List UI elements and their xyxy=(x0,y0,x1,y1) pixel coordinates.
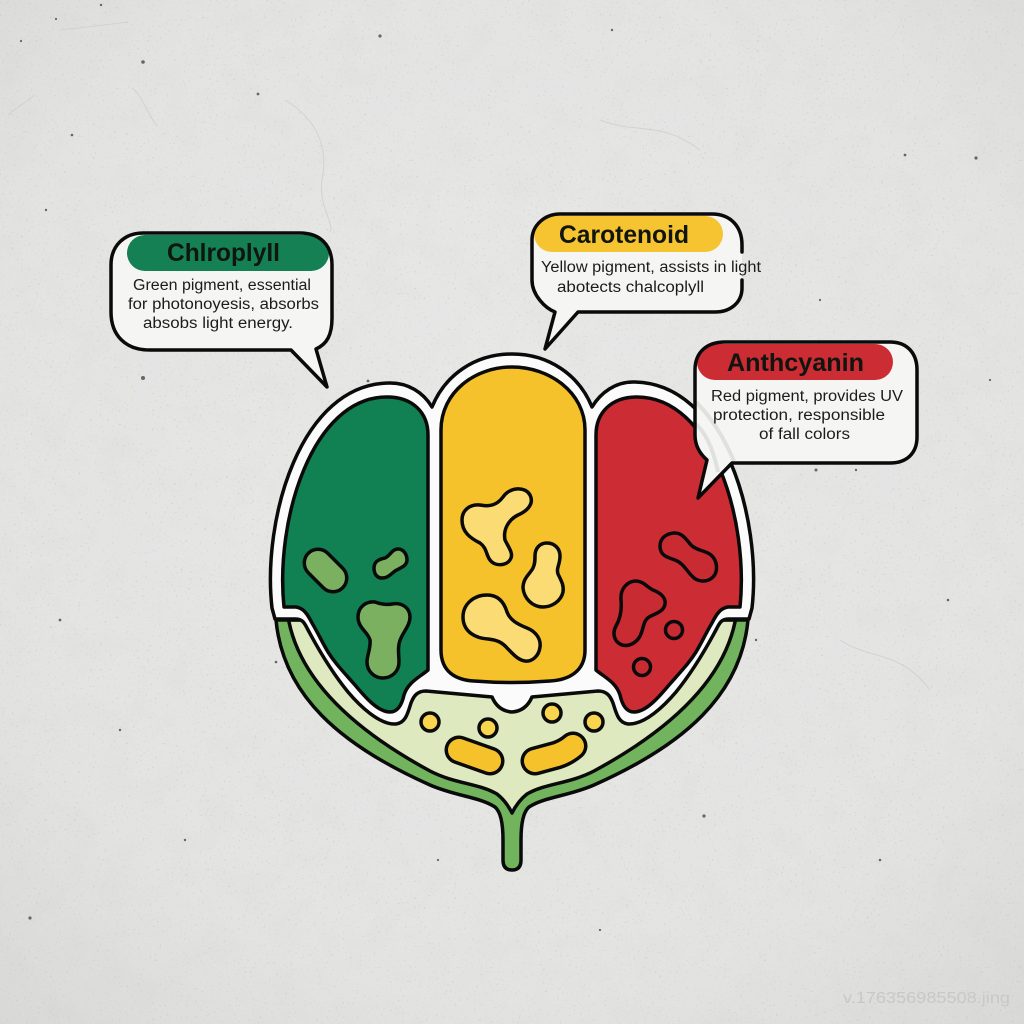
yellow blob lower xyxy=(463,595,540,661)
callout: chlorophyll xyxy=(111,233,332,387)
outer leaf blade and stem xyxy=(276,620,748,870)
green chloroplast large xyxy=(358,602,410,678)
pale green inner tissue xyxy=(289,622,735,813)
red round vacuole upper xyxy=(666,622,682,638)
green chloroplast capsule xyxy=(318,563,333,578)
red dumbbell vacuole xyxy=(660,533,717,581)
anthocyanin bubble outline xyxy=(695,342,917,498)
chlorophyll description xyxy=(128,277,319,332)
anthocyanin header pill xyxy=(697,344,893,380)
green chlorophyll chamber xyxy=(283,397,428,712)
yellow blob upper xyxy=(462,489,531,565)
yellow carotenoid chamber xyxy=(441,367,585,682)
carotenoid description: abotects chalcoplyll xyxy=(557,279,704,296)
red anthocyanin chamber xyxy=(596,397,741,712)
chlorophyll description: for photonoyesis, absorbs xyxy=(128,296,319,313)
carotenoid header pill xyxy=(534,216,723,252)
anthocyanin description: of fall colors xyxy=(759,426,850,443)
anthocyanin description: Red pigment, provides UV xyxy=(711,388,904,405)
anthocyanin description: protection, responsible xyxy=(713,407,885,424)
yellow dots in pale tissue xyxy=(421,704,603,737)
red irregular vacuole xyxy=(614,581,665,645)
carotenoid bubble outline xyxy=(532,214,742,349)
leaf cross-section diagram xyxy=(270,354,754,870)
yellow capsule right xyxy=(535,746,573,761)
yellow blob right xyxy=(523,543,563,607)
chlorophyll description: absobs light energy. xyxy=(143,315,293,332)
carotenoid title: Carotenoid xyxy=(559,221,689,249)
chlorophyll header pill xyxy=(127,235,329,271)
chlorophyll title: Chlroplyll xyxy=(167,239,280,267)
anthocyanin description xyxy=(711,388,904,443)
watermark filename: v.176356985508.jing xyxy=(843,990,1010,1007)
carotenoid description: Yellow pigment, assists in light xyxy=(541,259,762,276)
green chloroplast small xyxy=(374,549,407,578)
yellow capsule left xyxy=(459,750,490,761)
carotenoid description xyxy=(541,259,762,296)
chlorophyll bubble outline xyxy=(111,233,332,387)
callout: anthocyanin xyxy=(695,342,917,498)
red round vacuole lower xyxy=(634,658,650,676)
callout: carotenoid xyxy=(532,214,762,349)
anthocyanin title: Anthcyanin xyxy=(727,349,864,377)
white cell wall outline xyxy=(270,354,754,724)
chlorophyll description: Green pigment, essential xyxy=(133,277,311,294)
